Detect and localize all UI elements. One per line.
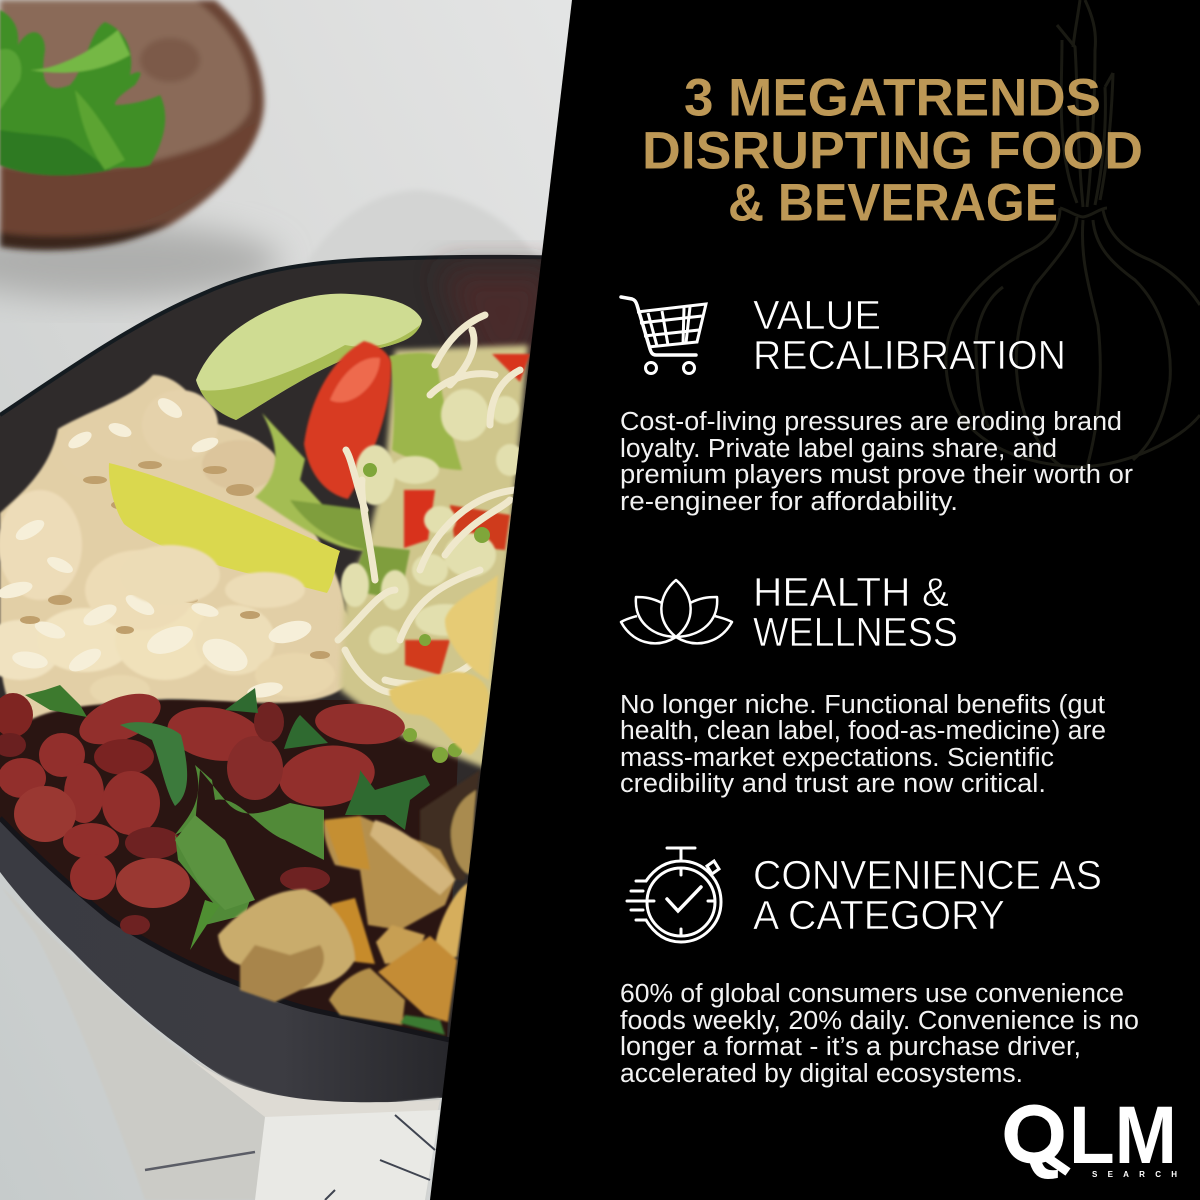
panel: black diagonal bbox=[430, 0, 1200, 1200]
body text: value recalibration: premium players must prove their worth or bbox=[620, 461, 1134, 489]
body text: value recalibration: re-engineer for affordability. bbox=[620, 488, 958, 516]
heading: value recalibration bbox=[753, 292, 1066, 378]
logo: QLM Search: LM bbox=[1069, 1090, 1177, 1181]
title: 3 MEGATRENDS bbox=[684, 68, 1101, 128]
sprout bed bbox=[340, 345, 528, 770]
body text: convenience as a category: accelerated by digital ecosystems. bbox=[620, 1060, 1023, 1088]
heading: convenience as a category: A CATEGORY bbox=[753, 892, 1005, 938]
logo: QLM Search bbox=[1002, 1090, 1177, 1181]
body text: convenience as a category bbox=[620, 980, 1139, 1088]
heading: value recalibration: RECALIBRATION bbox=[753, 332, 1066, 378]
body text: convenience as a category: foods weekly, 20% daily. Convenience is no bbox=[620, 1007, 1139, 1035]
black plate bbox=[0, 257, 575, 1106]
background photo: food bowl on table bbox=[0, 0, 600, 1200]
body text: health and wellness: No longer niche. Functional benefits (gut bbox=[620, 691, 1105, 719]
panel: health and wellness bbox=[620, 569, 1106, 798]
icon: shopping cart bbox=[621, 297, 706, 374]
tablecloth bbox=[0, 885, 440, 1200]
body text: value recalibration: loyalty. Private label gains share, and bbox=[620, 435, 1057, 463]
heading: health and wellness: HEALTH & bbox=[753, 569, 949, 615]
rice bbox=[0, 375, 361, 720]
icon: stopwatch bbox=[627, 848, 721, 942]
lemon wedge bbox=[109, 463, 340, 593]
title bbox=[642, 68, 1143, 232]
heading: value recalibration: VALUE bbox=[753, 292, 881, 338]
plate right inner tint bbox=[440, 270, 560, 370]
heading: health and wellness: WELLNESS bbox=[753, 609, 958, 655]
body text: health and wellness: health, clean label, food-as-medicine) are bbox=[620, 717, 1106, 745]
lettuce bbox=[255, 353, 462, 600]
napkin behind plate bbox=[305, 190, 540, 265]
body text: convenience as a category: 60% of global consumers use convenience bbox=[620, 980, 1124, 1008]
plate outer wall bbox=[0, 800, 470, 1106]
logo: QLM Search: Q bbox=[1002, 1090, 1067, 1181]
shadow under wooden bowl bbox=[0, 224, 280, 300]
cilantro leaves bbox=[25, 685, 430, 950]
rice grains texture bbox=[0, 394, 314, 700]
body text: health and wellness: mass-market expectations. Scientific bbox=[620, 744, 1054, 772]
heading: health and wellness bbox=[753, 569, 958, 655]
body text: value recalibration bbox=[620, 408, 1134, 516]
background onion line illustration bbox=[946, 0, 1200, 467]
wooden bowl bbox=[0, 0, 264, 250]
panel: value recalibration bbox=[620, 292, 1134, 516]
mushrooms bbox=[218, 770, 480, 1035]
plate interior bbox=[0, 257, 575, 1060]
heading: convenience as a category: CONVENIENCE AS bbox=[753, 852, 1102, 898]
herbs in wooden bowl bbox=[0, 10, 165, 175]
lime slice bbox=[196, 294, 422, 420]
title: & BEVERAGE bbox=[728, 174, 1058, 232]
kidney beans bbox=[0, 683, 407, 935]
heading: convenience as a category bbox=[753, 852, 1102, 938]
body text: value recalibration: Cost-of-living pressures are eroding brand bbox=[620, 408, 1122, 436]
title: DISRUPTING FOOD bbox=[642, 122, 1143, 180]
body text: health and wellness bbox=[620, 691, 1106, 798]
rice over lemon bbox=[120, 545, 305, 608]
sprouts and chickpeas bbox=[338, 315, 524, 763]
tofu pieces bbox=[389, 575, 498, 755]
logo: QLM Search: SEARCH bbox=[1092, 1170, 1177, 1179]
panel: convenience as a category bbox=[620, 848, 1139, 1088]
tomatoes bbox=[304, 341, 530, 675]
body text: convenience as a category: longer a format - it’s a purchase driver, bbox=[620, 1033, 1081, 1061]
icon: lotus bbox=[621, 580, 732, 643]
food base shadow bbox=[0, 700, 460, 1040]
body text: health and wellness: credibility and trust are now critical. bbox=[620, 770, 1046, 798]
